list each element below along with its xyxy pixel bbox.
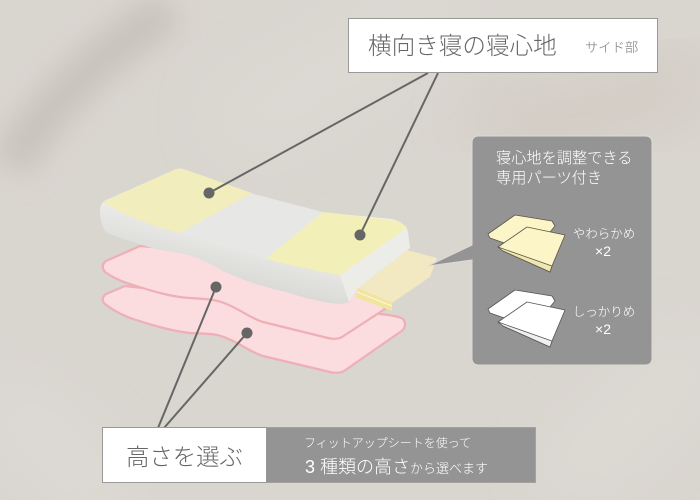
pillow right yellow panel bbox=[266, 212, 407, 275]
bottom banner: choose height bbox=[102, 428, 536, 482]
callout pointer and body bbox=[428, 136, 652, 365]
text: firm: しっかりめ bbox=[573, 305, 635, 319]
callout heading: 専用パーツ付き bbox=[496, 170, 602, 187]
banner subtext: フィットアップシートを使って bbox=[304, 436, 471, 450]
pillow center top bbox=[180, 193, 323, 259]
pink sheet: lower bbox=[103, 286, 405, 373]
leader lines: top bbox=[209, 73, 438, 235]
banner heading: 高さを選ぶ bbox=[126, 444, 243, 470]
pillow left yellow panel bbox=[103, 168, 252, 233]
leader lines: bottom bbox=[158, 287, 247, 428]
insert part bbox=[355, 250, 437, 311]
callout heading: 寝心地を調整できる bbox=[496, 150, 632, 167]
pink sheet: upper bbox=[103, 246, 385, 339]
banner white box bbox=[102, 428, 266, 482]
text: soft: やわらかめ bbox=[573, 227, 635, 241]
icon: soft yellow sheets bbox=[488, 215, 565, 272]
text: soft: ×2 bbox=[595, 243, 611, 259]
banner dark panel bbox=[266, 428, 536, 482]
title text: 横向き寝の寝心地 bbox=[368, 33, 557, 60]
icon: firm white sheets bbox=[488, 290, 565, 347]
pillow body bbox=[100, 168, 410, 304]
pillow right side face bbox=[340, 229, 410, 302]
side label: サイド部 bbox=[585, 40, 638, 55]
callout panel: parts bbox=[428, 136, 652, 365]
title box: side comfort bbox=[348, 18, 658, 72]
banner main text: 3 種類の高さから選べます bbox=[305, 457, 488, 477]
pillow bbox=[100, 168, 410, 304]
marker dots bbox=[204, 188, 366, 338]
text: firm: ×2 bbox=[595, 321, 611, 337]
